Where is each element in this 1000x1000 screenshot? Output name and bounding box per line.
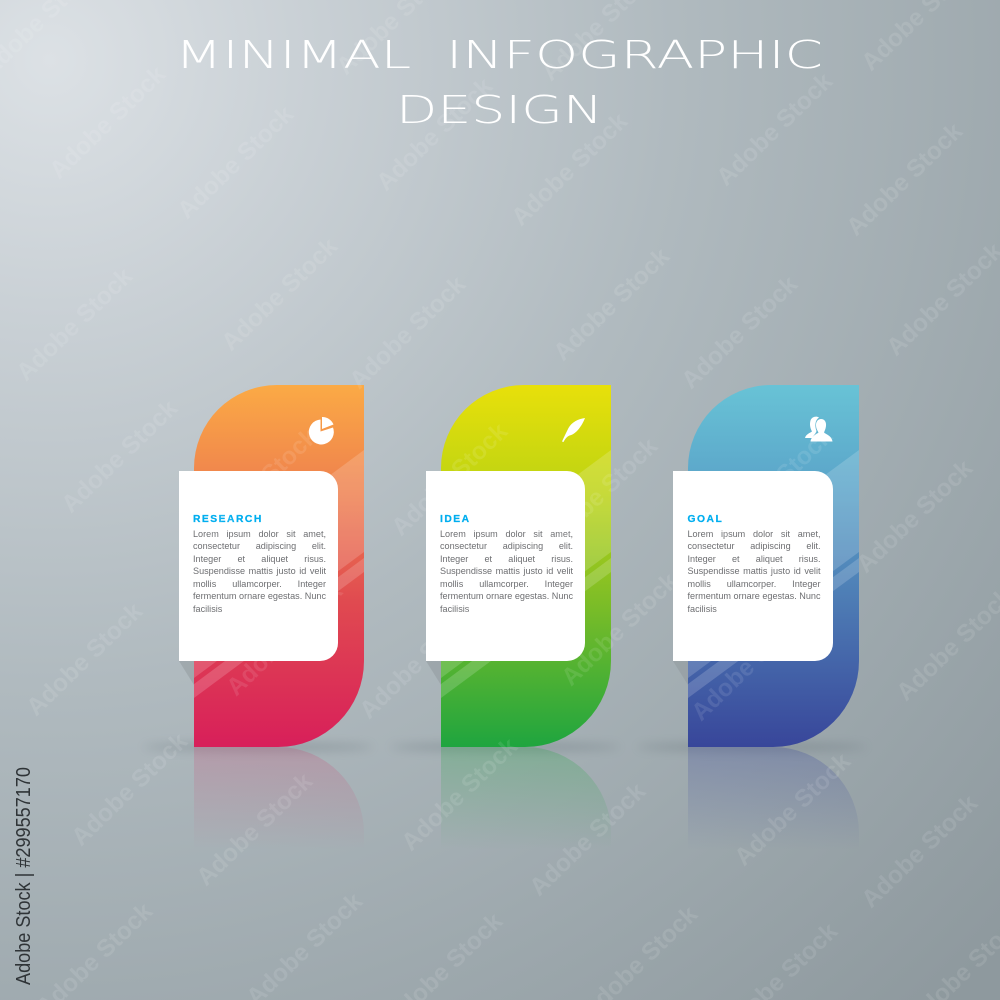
body text: mollis ullamcorper. Integer bbox=[440, 579, 573, 589]
heading: RESEARCH bbox=[193, 514, 263, 524]
body text: Integer et aliquet risus. bbox=[193, 554, 326, 564]
watermark: Adobe Stock bbox=[549, 243, 675, 366]
watermark: Adobe Stock bbox=[197, 423, 323, 546]
watermark: Adobe Stock bbox=[387, 418, 513, 541]
body text: facilisis bbox=[440, 604, 469, 614]
body text: mollis ullamcorper. Integer bbox=[688, 579, 820, 589]
icon: users bbox=[805, 416, 832, 442]
card bbox=[179, 471, 338, 661]
watermark: Adobe Stock bbox=[345, 271, 471, 394]
icon: pie chart bbox=[308, 417, 334, 444]
body text: Lorem ipsum dolor sit amet, bbox=[440, 528, 573, 538]
body text bbox=[193, 528, 326, 614]
body text: Lorem ipsum dolor sit amet, bbox=[193, 528, 326, 538]
orange to red leaf shape with gloss bbox=[179, 385, 364, 747]
panel: research bbox=[179, 385, 364, 747]
watermark: Adobe Stock bbox=[355, 601, 481, 724]
body text: facilisis bbox=[193, 604, 222, 614]
body text bbox=[440, 528, 573, 614]
body text: fermentum ornare egestas. Nunc bbox=[688, 591, 820, 601]
watermark: Adobe Stock bbox=[557, 568, 683, 691]
watermark: Adobe Stock bbox=[173, 101, 299, 224]
panel: idea bbox=[426, 385, 611, 747]
watermark: Adobe Stock bbox=[687, 603, 813, 726]
body text: consectetur adipiscing elit. bbox=[688, 541, 820, 551]
reflections beneath the panels bbox=[158, 742, 858, 826]
watermark: Adobe Stock bbox=[507, 108, 633, 231]
body text: mollis ullamcorper. Integer bbox=[193, 579, 326, 589]
watermark: Adobe Stock bbox=[397, 733, 523, 856]
panel: goal bbox=[673, 385, 859, 747]
body text: consectetur adipiscing elit. bbox=[193, 541, 326, 551]
watermark: Adobe Stock bbox=[217, 233, 343, 356]
watermark: Adobe Stock bbox=[45, 61, 171, 184]
watermark: Adobe Stock bbox=[537, 433, 663, 556]
title bbox=[175, 33, 823, 130]
body text: facilisis bbox=[688, 604, 717, 614]
body text: consectetur adipiscing elit. bbox=[440, 541, 573, 551]
watermark: Adobe Stock bbox=[857, 790, 983, 913]
watermark: Adobe Stock bbox=[712, 423, 838, 546]
body text: Suspendisse mattis justo id velit bbox=[688, 566, 820, 576]
body text: Integer et aliquet risus. bbox=[440, 554, 573, 564]
watermark: Adobe Stock bbox=[192, 768, 318, 891]
watermark: Adobe Stock bbox=[712, 68, 838, 191]
yellow to green leaf shape with gloss bbox=[426, 385, 611, 747]
card bbox=[673, 471, 833, 661]
blue leaf shape with gloss bbox=[673, 385, 859, 747]
icon: feather bbox=[562, 418, 585, 442]
body text: fermentum ornare egestas. Nunc bbox=[440, 591, 573, 601]
watermark: Adobe Stock bbox=[12, 263, 138, 386]
body text: fermentum ornare egestas. Nunc bbox=[193, 591, 326, 601]
watermark: Adobe Stock bbox=[842, 118, 968, 241]
body text: Suspendisse mattis justo id velit bbox=[193, 566, 326, 576]
title: MINIMAL INFOGRAPHIC bbox=[175, 33, 823, 78]
watermark: Adobe Stock bbox=[57, 395, 183, 518]
watermark: Adobe Stock bbox=[525, 778, 651, 901]
heading: GOAL bbox=[688, 514, 723, 524]
watermark: Adobe Stock bbox=[677, 271, 803, 394]
watermark: Adobe Stock bbox=[372, 73, 498, 196]
card bbox=[426, 471, 585, 661]
heading: IDEA bbox=[440, 514, 471, 524]
watermark: Adobe Stock bbox=[852, 455, 978, 578]
watermark: Adobe Stock bbox=[67, 728, 193, 851]
body text: Lorem ipsum dolor sit amet, bbox=[688, 528, 820, 538]
body text bbox=[688, 528, 820, 614]
body text: Suspendisse mattis justo id velit bbox=[440, 566, 573, 576]
watermark: Adobe Stock bbox=[22, 598, 148, 721]
body text: Integer et aliquet risus. bbox=[688, 554, 820, 564]
watermark: Adobe Stock bbox=[222, 578, 348, 701]
watermark: Adobe Stock bbox=[730, 748, 856, 871]
